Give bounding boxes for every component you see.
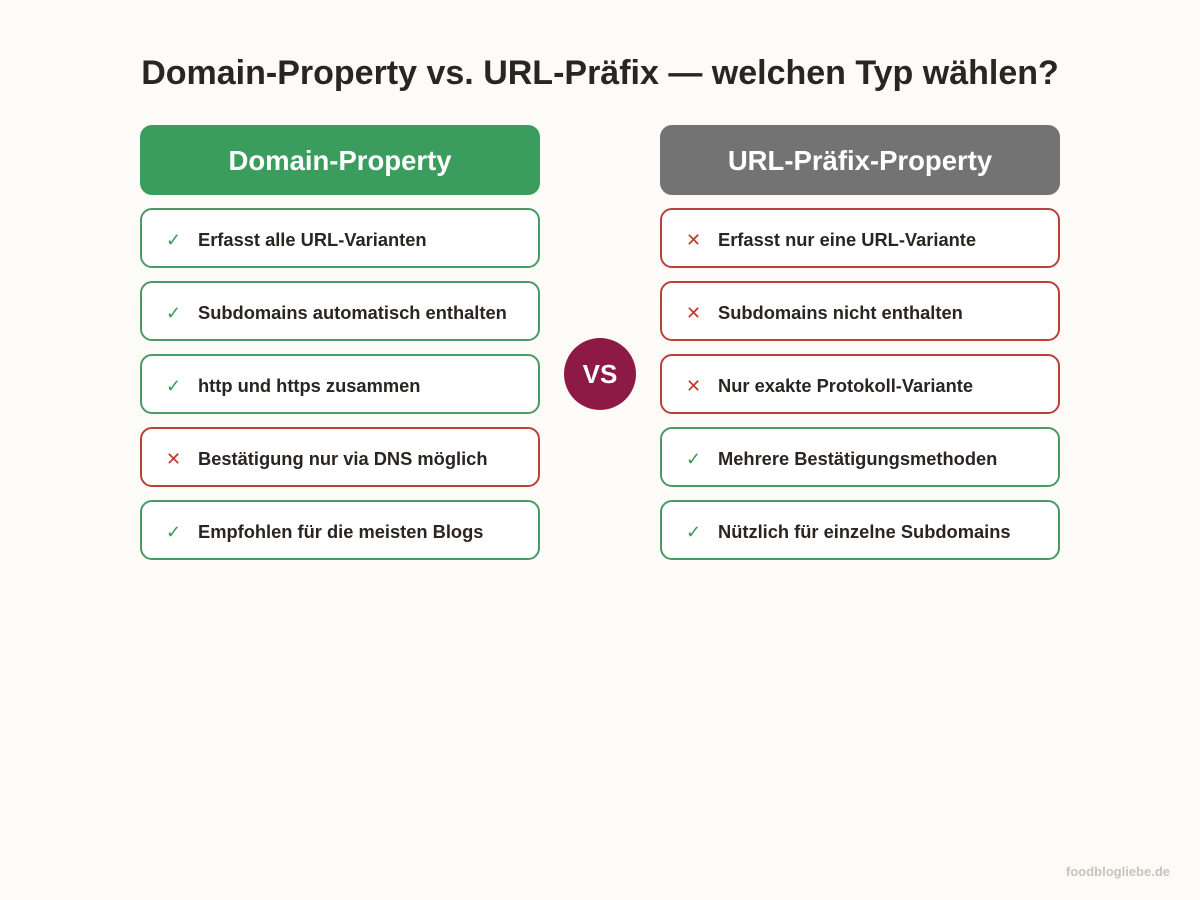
item: http und https zusammen: [198, 375, 420, 396]
item: [140, 500, 540, 560]
item: [660, 281, 1060, 341]
vs badge: [564, 338, 636, 410]
item: ✓: [166, 230, 181, 250]
item: ✕: [686, 376, 701, 396]
title: Domain-Property vs. URL-Präfix — welchen Typ wählen?: [141, 54, 1059, 92]
item: ✓: [686, 449, 701, 469]
item: ✕: [686, 230, 701, 250]
item: [660, 354, 1060, 414]
item: Nützlich für einzelne Subdomains: [718, 521, 1011, 542]
panel: domain property: [140, 125, 540, 560]
item: [140, 208, 540, 268]
item: ✓: [686, 522, 701, 542]
item: [140, 427, 540, 487]
vs badge: VS: [583, 359, 617, 389]
item: ✓: [166, 522, 181, 542]
item: Mehrere Bestätigungsmethoden: [718, 448, 997, 469]
item: Bestätigung nur via DNS möglich: [198, 448, 487, 469]
item: Erfasst alle URL-Varianten: [198, 229, 427, 250]
item: Erfasst nur eine URL-Variante: [718, 229, 976, 250]
heading: url prefix: [660, 125, 1060, 195]
heading: url prefix: URL-Präfix-Property: [728, 145, 992, 176]
item: Empfohlen für die meisten Blogs: [198, 521, 483, 542]
item: ✓: [166, 303, 181, 323]
item: ✓: [166, 376, 181, 396]
footer: foodblogliebe.de: [1066, 864, 1170, 879]
heading: domain property: [140, 125, 540, 195]
item: Subdomains nicht enthalten: [718, 302, 963, 323]
item: [660, 500, 1060, 560]
item: ✕: [166, 449, 181, 469]
item: [140, 354, 540, 414]
item: [660, 208, 1060, 268]
heading: domain property: Domain-Property: [228, 145, 452, 176]
item: [140, 281, 540, 341]
panel: url prefix: [660, 125, 1060, 560]
item: Subdomains automatisch enthalten: [198, 302, 507, 323]
item: Nur exakte Protokoll-Variante: [718, 375, 973, 396]
item: ✕: [686, 303, 701, 323]
item: [660, 427, 1060, 487]
